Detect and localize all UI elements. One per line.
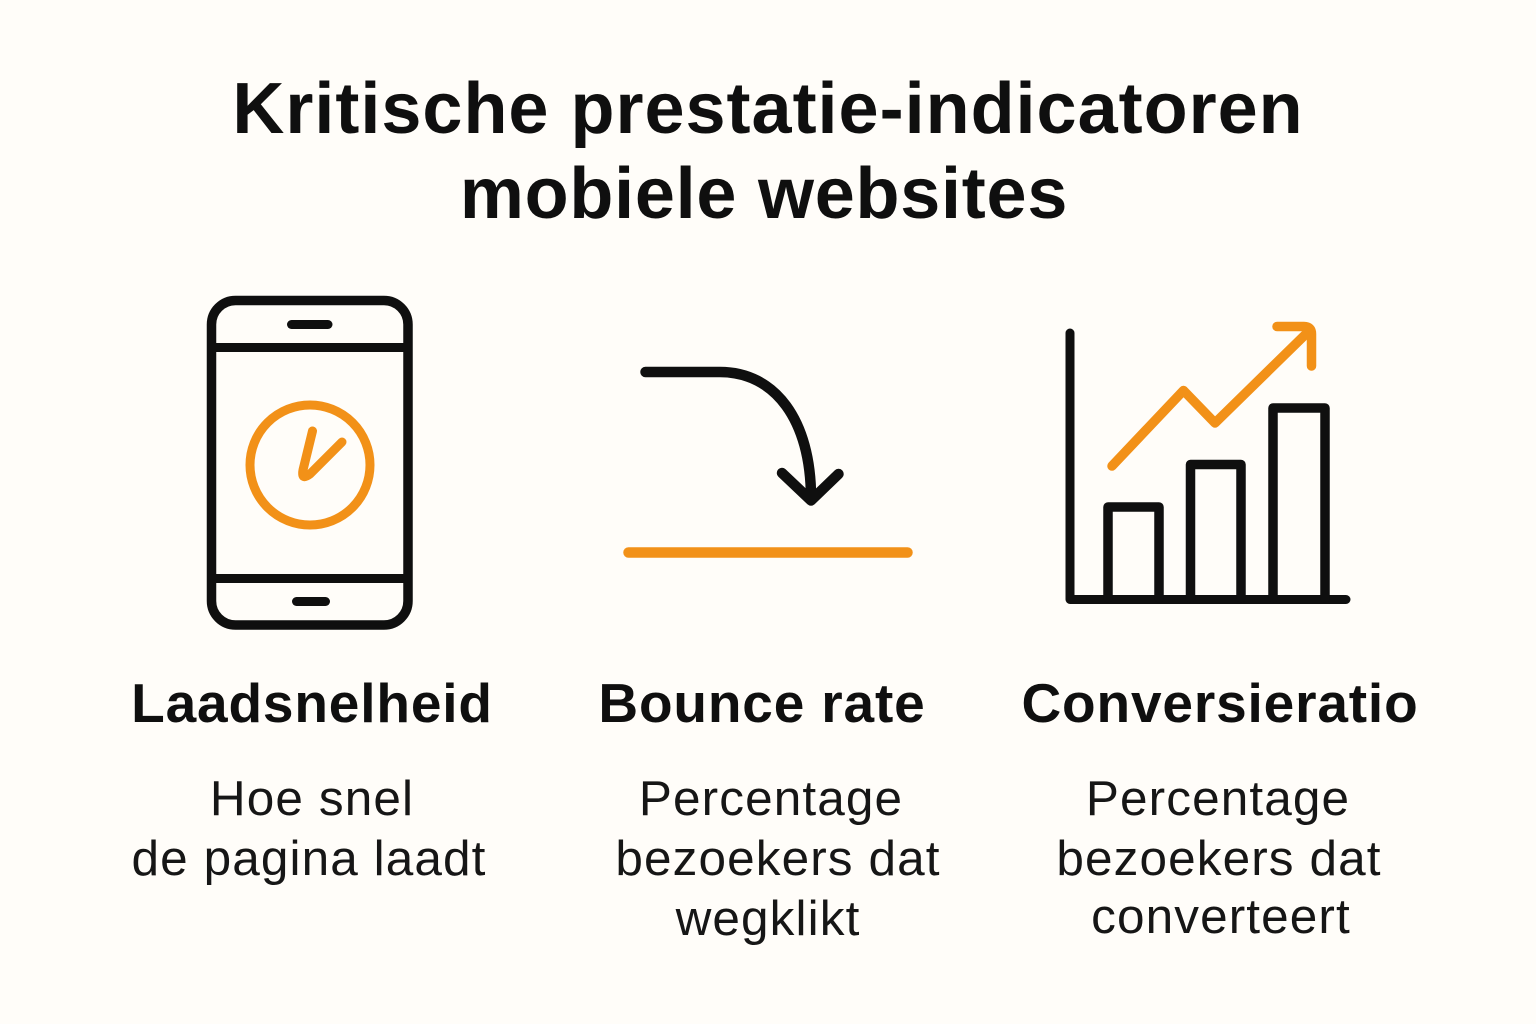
heading: Conversieratio: Conversieratio <box>1021 672 1419 734</box>
column: Bounce rate <box>598 672 941 946</box>
description: Conversieratio: Percentage <box>1086 771 1350 826</box>
description: Conversieratio <box>1056 771 1382 944</box>
description: Bounce rate: wegklikt <box>676 891 860 946</box>
description: Bounce rate: bezoekers dat <box>615 831 941 886</box>
description: Laadsnelheid: de pagina laadt <box>131 831 487 886</box>
heading: Laadsnelheid: Laadsnelheid <box>131 672 493 734</box>
description: Conversieratio: converteert <box>1091 889 1351 944</box>
description: Conversieratio: bezoekers dat <box>1056 831 1382 886</box>
description: Bounce rate: Percentage <box>639 771 903 826</box>
icon: bounce arrow <box>628 372 908 552</box>
column: Laadsnelheid <box>131 672 493 886</box>
icon: growth bar chart <box>1070 326 1346 600</box>
title: Kritische prestatie-indicatoren <box>232 69 1304 149</box>
title: mobiele websites <box>460 154 1068 234</box>
description: Laadsnelheid: Hoe snel <box>210 771 414 826</box>
description: Bounce rate <box>615 771 941 946</box>
heading: Bounce rate: Bounce rate <box>598 672 926 734</box>
title <box>232 69 1304 234</box>
column: Conversieratio <box>1021 672 1419 944</box>
description: Laadsnelheid <box>131 771 487 886</box>
icon: smartphone with speed gauge <box>212 300 408 625</box>
